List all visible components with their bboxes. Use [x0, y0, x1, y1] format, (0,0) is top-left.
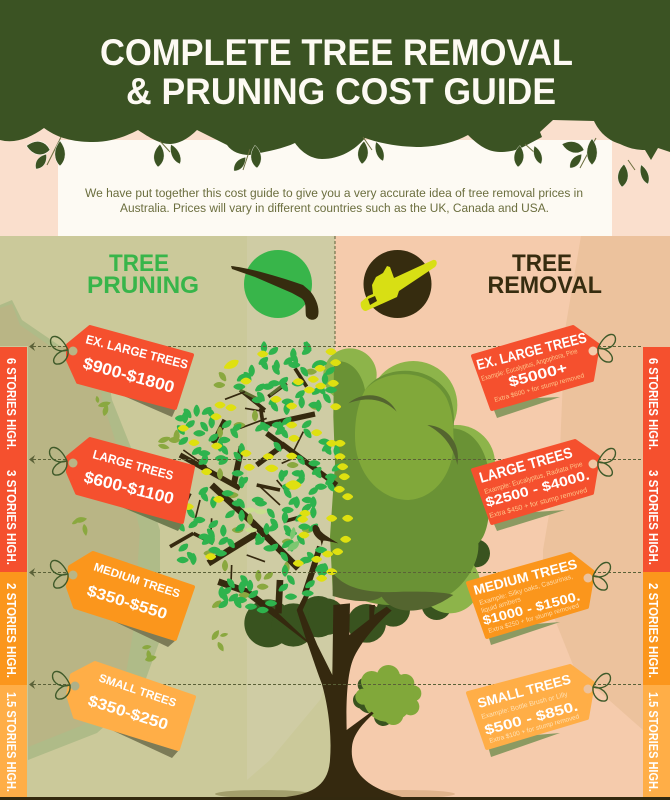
panel: removal background — [335, 236, 670, 798]
illustration: half pruned half full tree — [170, 343, 495, 797]
bottom ground strip — [0, 797, 670, 800]
heading: tree removal: REMOVAL — [488, 272, 602, 299]
left height scale: 3 STORIES HIGH. — [4, 470, 18, 565]
left height scale: 6 STORIES HIGH. — [4, 358, 18, 450]
tag: removal small: Extra $100 + for stump removed — [489, 713, 581, 745]
left height scale: 2 STORIES HIGH. — [4, 583, 18, 678]
intro text: We have put together this cost guide to give you a very accurate idea of tree removal prices in — [85, 186, 583, 200]
tag: pruning medium: MEDIUM TREES — [92, 561, 182, 601]
tag: removal extra large: $5000+ — [507, 360, 569, 391]
foliage: light lobes — [323, 348, 495, 613]
trunk — [268, 593, 403, 797]
arrowheads on guide lines — [29, 342, 35, 689]
tag: pruning large — [50, 439, 193, 531]
foliage: light centre — [355, 374, 454, 500]
tag: pruning extra large: EX. LARGE TREES — [84, 332, 189, 372]
pale and soft green leaves — [245, 508, 266, 532]
tag: removal small: Example: Bottle Brush or Lilly — [481, 691, 569, 721]
pale green patch leaves — [288, 528, 298, 550]
heading: tree removal: TREE — [512, 250, 572, 277]
tag: removal medium — [468, 554, 610, 645]
tag: removal large: Extra $450 + for stump removed — [489, 487, 588, 520]
bare branches — [170, 368, 337, 615]
tag: pruning large: $600-$1100 — [82, 468, 176, 508]
left height scale — [0, 347, 27, 797]
tag: removal medium: MEDIUM TREES — [472, 556, 579, 598]
ground shadow — [215, 790, 455, 798]
tag: removal small — [468, 666, 610, 757]
tag: removal extra large — [473, 327, 615, 418]
small bush — [353, 665, 421, 726]
title — [100, 32, 573, 112]
tag: pruning small — [53, 663, 194, 758]
title: COMPLETE TREE REMOVAL — [100, 32, 573, 73]
tag: removal large: Example: Eucalyptus, Radiata Pine — [484, 461, 584, 496]
loose falling leaves — [71, 396, 229, 663]
yellow leaves — [179, 350, 352, 580]
tag: removal extra large: Example: Eucalyptus, Angophora, Pine — [481, 348, 579, 383]
panel: pruning background — [0, 236, 335, 798]
heading: tree pruning — [87, 250, 199, 299]
tag: removal extra large: Extra $600 + for stump removed — [494, 372, 586, 404]
right height scale: 3 STORIES HIGH. — [646, 470, 660, 565]
header background — [0, 0, 670, 236]
right height scale — [643, 347, 670, 797]
bird — [313, 525, 338, 546]
tag: pruning extra large — [51, 327, 192, 417]
heading: tree removal — [488, 250, 602, 299]
dashed height guide lines — [33, 236, 643, 684]
tag: pruning extra large: $900-$1800 — [81, 355, 176, 397]
tag: removal medium: liquid ambers — [481, 596, 522, 615]
icon: canopy leaf sprigs — [25, 137, 651, 187]
title: & PRUNING COST GUIDE — [126, 71, 556, 112]
tag: removal large: LARGE TREES — [477, 444, 574, 487]
bright green leaves — [177, 343, 340, 612]
tag: removal medium: Example: Silky oaks, Casurinas, — [479, 573, 574, 607]
tag: pruning medium: $350-$550 — [85, 583, 169, 623]
tag: removal small: $500 - $850. — [483, 698, 580, 738]
tag: removal medium: Extra $250 + for stump removed — [488, 602, 580, 635]
tag: pruning small: $350-$250 — [86, 693, 170, 734]
right height scale: 6 STORIES HIGH. — [646, 358, 660, 450]
tag: removal small: SMALL TREES — [476, 672, 573, 711]
foliage: lower shade — [333, 573, 453, 611]
tag: pruning small: SMALL TREES — [97, 672, 178, 710]
foliage: main body — [330, 361, 490, 605]
icon: chainsaw — [361, 250, 437, 318]
dark back foliage — [244, 539, 490, 647]
tag: pruning medium — [51, 553, 193, 647]
icon: pruning saw — [231, 250, 319, 320]
foliage: crescent shades — [348, 395, 458, 465]
intro text — [85, 186, 583, 215]
right height scale: 2 STORIES HIGH. — [646, 583, 660, 678]
heading: tree pruning: TREE — [109, 250, 169, 277]
tag: removal medium: $1000 - $1500. — [481, 588, 582, 628]
tag: removal large: $2500 - $4000. — [484, 467, 591, 510]
heading: tree pruning: PRUNING — [87, 272, 199, 299]
olive leaves — [170, 370, 320, 607]
header canopy — [0, 0, 670, 160]
tag: removal large — [473, 441, 615, 531]
tag: pruning large: LARGE TREES — [91, 447, 175, 483]
intro text: Australia. Prices will vary in different countries such as the UK, Canada and USA. — [120, 201, 549, 215]
tag: removal extra large: EX. LARGE TREES — [475, 330, 589, 374]
